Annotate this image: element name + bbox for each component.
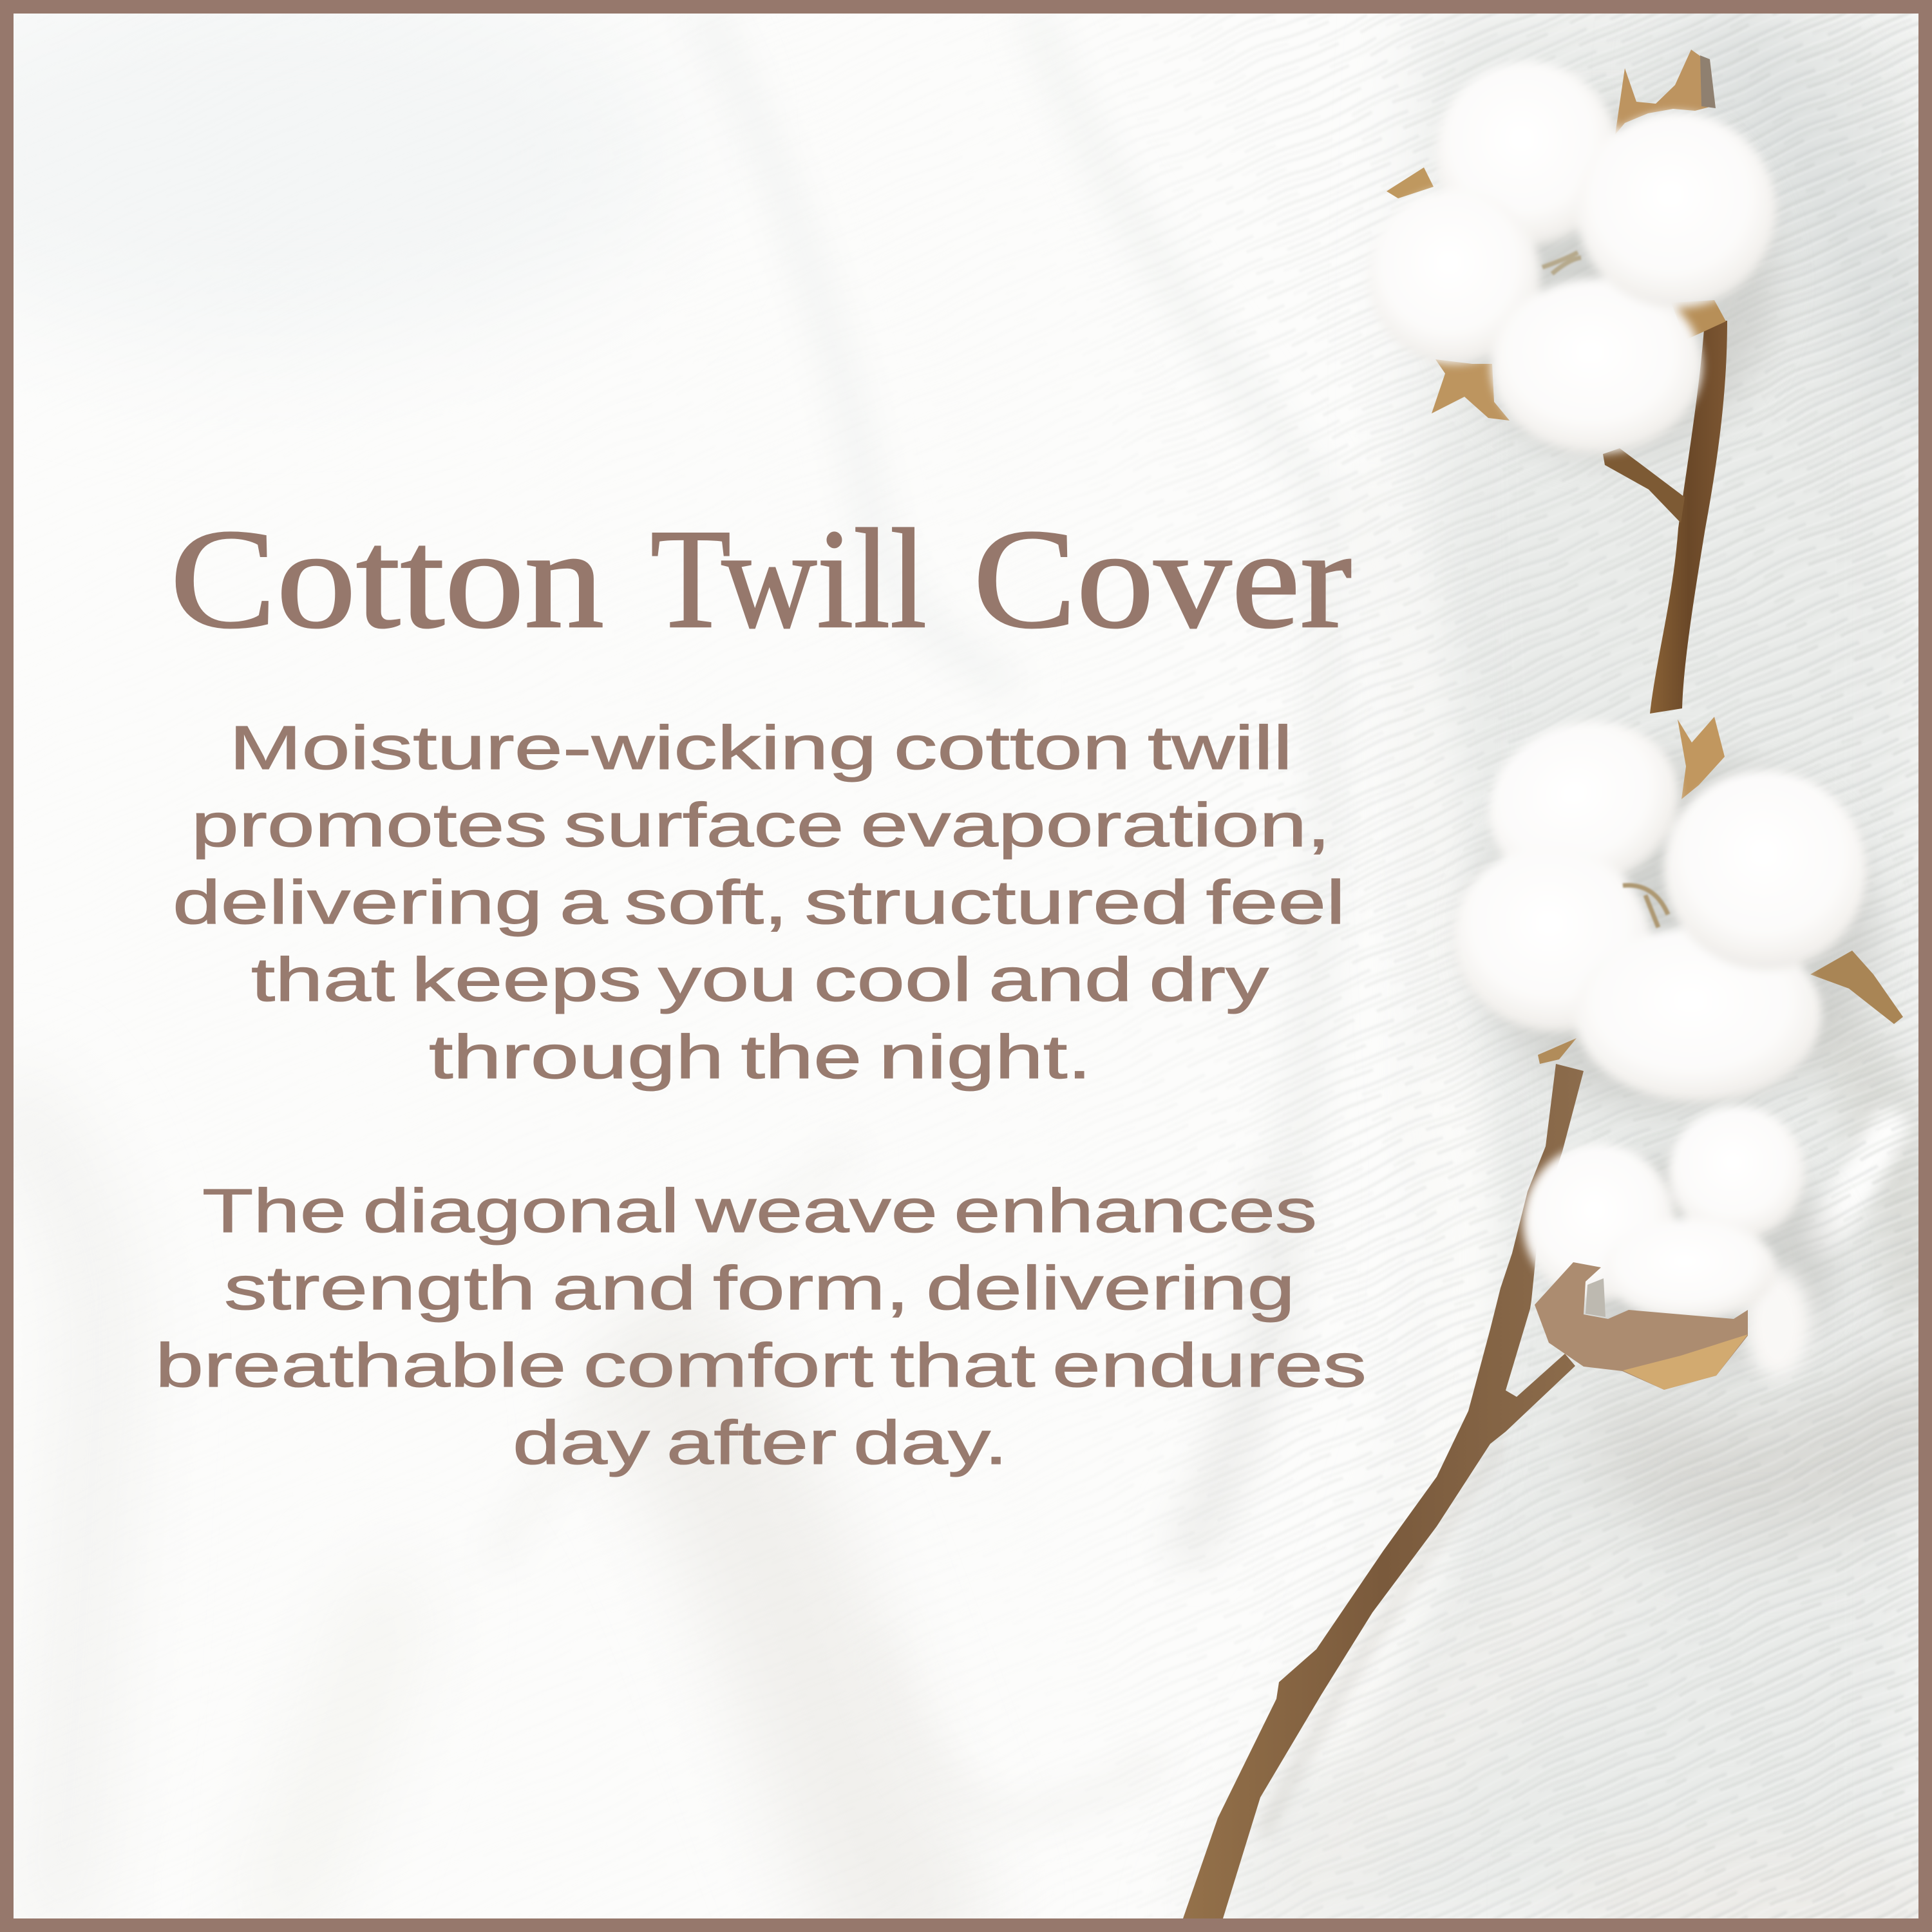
upper stem bbox=[1603, 321, 1727, 714]
title: Cover bbox=[973, 500, 1352, 658]
text block: moisture-wicking bbox=[173, 714, 1345, 1092]
branch shadow bbox=[1262, 1443, 1501, 1835]
cotton boll: top bbox=[1368, 61, 1776, 453]
text block: moisture-wicking: promotes surface evaporation, bbox=[191, 791, 1331, 860]
text block: diagonal weave: The diagonal weave enhances bbox=[202, 1177, 1317, 1245]
text block: diagonal weave: breathable comfort that endures bbox=[155, 1331, 1367, 1400]
text block: moisture-wicking: through the night. bbox=[429, 1023, 1092, 1092]
middle boll husks bbox=[1538, 717, 1903, 1064]
title: Cotton bbox=[170, 500, 604, 658]
text block: diagonal weave: day after day. bbox=[513, 1408, 1008, 1477]
cotton boll: lower bbox=[1523, 1106, 1811, 1378]
top boll husks bbox=[1387, 50, 1726, 421]
title bbox=[170, 500, 1352, 658]
fabric shading: top left corner bbox=[0, 0, 670, 348]
text block: moisture-wicking: that keeps you cool and dry bbox=[251, 945, 1269, 1014]
fabric shading: right side bbox=[1191, 0, 1932, 1932]
title: Twill bbox=[650, 500, 927, 658]
lower boll husk bbox=[1535, 1262, 1748, 1390]
boll shadows bbox=[1446, 109, 1874, 1372]
fabric texture bbox=[1270, 14, 1918, 1918]
cotton boll: middle bbox=[1435, 697, 1889, 1102]
text block: diagonal weave: strength and form, delivering bbox=[224, 1254, 1295, 1323]
cotton branch bbox=[1183, 50, 1903, 1918]
text block: moisture-wicking: Moisture-wicking cotton twill bbox=[229, 714, 1293, 782]
lower stem bbox=[1183, 1064, 1584, 1918]
boll centres bbox=[1542, 252, 1668, 927]
text block: moisture-wicking: delivering a soft, structured feel bbox=[173, 868, 1345, 937]
text block: diagonal weave bbox=[155, 1177, 1367, 1477]
fabric background bbox=[507, 14, 1918, 1918]
